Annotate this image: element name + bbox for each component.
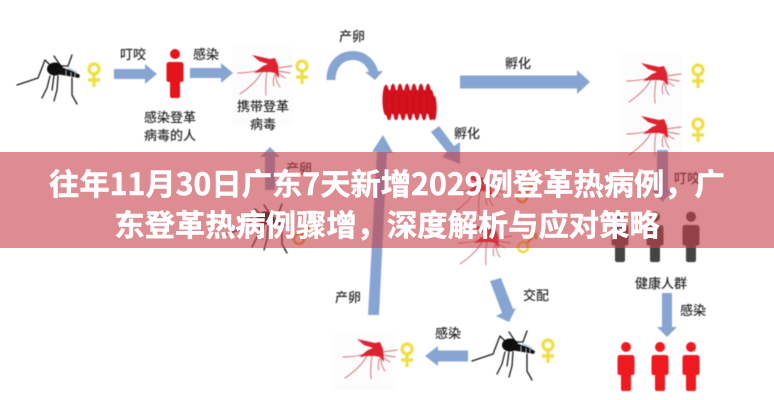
arrow: bite down	[652, 150, 673, 202]
label: infect: 感染	[193, 47, 219, 62]
icon: female symbol	[692, 65, 704, 88]
arrow: infect	[190, 63, 233, 83]
label: lay eggs: 产卵	[339, 29, 365, 44]
icon: male symbol centre upper	[517, 186, 533, 202]
label: infect: 感染	[435, 326, 461, 341]
icon: female symbol	[88, 64, 100, 87]
red mosquito carrying virus	[238, 55, 292, 95]
black mosquito, bottom	[472, 331, 535, 380]
red mosquito, top right 2	[627, 116, 681, 156]
label: hatch: 孵化	[505, 56, 531, 71]
red mosquito, top right 1	[627, 63, 681, 103]
icon: infected people	[618, 342, 700, 391]
icon: male symbol centre	[518, 234, 536, 252]
arrow: infect down	[657, 293, 677, 337]
text: carrying dengue virus	[237, 99, 289, 132]
label: healthy people: 健康人群	[635, 276, 687, 291]
text: infected person	[144, 110, 196, 143]
eggs	[383, 84, 436, 120]
text: infected person: 感染登革	[144, 110, 196, 125]
arrow: up to eggs	[368, 135, 393, 315]
title: 东登革热病例骤增，深度解析与应对策略	[114, 201, 660, 245]
faint backing: top mosquitoes	[232, 47, 681, 390]
arrow: hatch diagonal	[431, 126, 460, 164]
title	[49, 160, 725, 245]
label: lay eggs faded: 产卵	[286, 161, 312, 176]
icon: healthy people	[612, 212, 700, 262]
arrow: hatch	[460, 70, 590, 94]
label: mate: 交配	[523, 288, 549, 303]
arrow: bite	[114, 64, 157, 84]
curved arrow: lay eggs	[331, 56, 383, 80]
arrow: up to carrying mosquito	[260, 147, 280, 190]
text: infected person: 病毒的人	[144, 128, 196, 143]
text: carrying dengue virus: 携带登革	[237, 99, 289, 114]
red mosquito, under band centre	[458, 225, 512, 265]
label: infect: 感染	[680, 303, 706, 318]
label: hatch: 孵化	[454, 126, 480, 141]
title band	[0, 152, 774, 248]
red mosquito, in band centre upper	[451, 174, 505, 214]
red mosquito, bottom	[343, 339, 397, 379]
black mosquito, top left	[17, 55, 80, 104]
icon: male symbol left	[294, 228, 310, 244]
arrow: infect left	[425, 346, 468, 366]
icon: female symbol	[401, 344, 413, 367]
arrow: mate	[490, 278, 516, 322]
label: bite, right: 叮咬	[674, 171, 700, 186]
text: carrying dengue virus: 病毒	[250, 117, 276, 132]
black mosquito, under band left	[227, 204, 290, 253]
icon: female symbol	[296, 61, 308, 84]
icon: female symbol	[542, 340, 554, 363]
label: bite: 叮咬	[120, 47, 146, 62]
icon: female symbol	[692, 119, 704, 142]
title: 往年11月30日广东7天新增2029例登革热病例，广	[49, 160, 725, 204]
label: lay eggs: 产卵	[335, 290, 361, 305]
icon: infected person	[166, 49, 184, 98]
